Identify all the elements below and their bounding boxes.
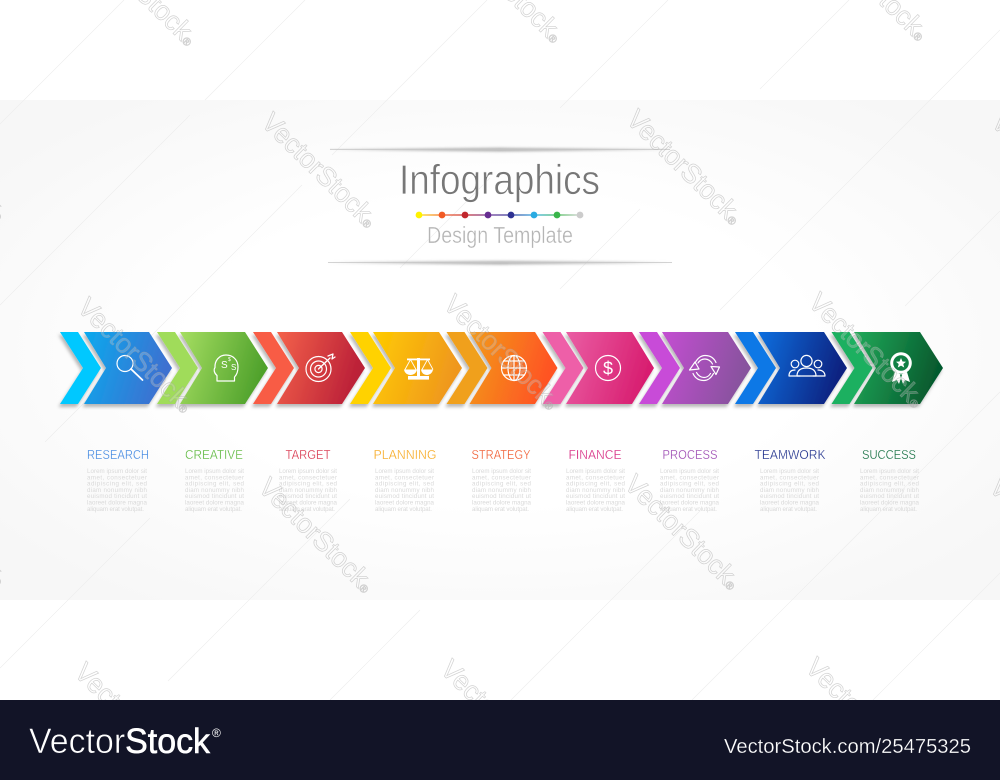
text block: teamwork: laoreet dolore magna (760, 500, 820, 506)
watermarks: VectorStock® (800, 652, 928, 778)
icon: award badge (890, 352, 912, 384)
text block: creative: euismod tincidunt ut (185, 493, 244, 500)
footer image id: VectorStock.com/25475325 (724, 736, 971, 758)
heading: creative: CREATIVE (185, 447, 243, 462)
heading: planning: PLANNING (374, 447, 436, 462)
text block: finance: diam nonummy nibh (566, 487, 626, 494)
text block: success: euismod tincidunt ut (860, 493, 919, 500)
icon: globe (502, 356, 526, 380)
arrow 6: finance (542, 332, 654, 404)
text block: finance: amet, consectetuer (566, 474, 625, 481)
text block: creative (185, 468, 245, 513)
text block: teamwork (760, 468, 820, 513)
text block: research (87, 468, 148, 513)
text block: planning (375, 468, 435, 513)
heading: teamwork: TEAMWORK (754, 447, 826, 462)
icon: magnifier (117, 356, 142, 380)
text block: success: diam nonummy nibh (860, 487, 920, 494)
arrow 1: research (60, 332, 172, 404)
text block: process: Lorem ipsum dolor sit (660, 468, 719, 475)
text block: target: diam nonummy nibh (279, 487, 338, 494)
text block: process: adipiscing elit, sed (660, 481, 720, 488)
icon: balance scale (404, 358, 433, 380)
text block: process: amet, consectetuer (660, 474, 719, 481)
text block: research: amet, consectetuer (87, 474, 147, 481)
text block: target: Lorem ipsum dolor sit (279, 468, 337, 475)
section headings (87, 447, 916, 462)
text block: creative: aliquam erat volutpat. (185, 506, 242, 513)
text block: creative: Lorem ipsum dolor sit (185, 468, 244, 475)
text block: process (660, 468, 720, 513)
icon: head with dollars: S (231, 363, 236, 372)
arrow chain (60, 332, 943, 404)
text block: teamwork: Lorem ipsum dolor sit (760, 468, 819, 475)
text block: planning: euismod tincidunt ut (375, 493, 434, 500)
icon: head with dollars (214, 355, 238, 381)
text block: success: amet, consectetuer (860, 474, 919, 481)
text block: planning: Lorem ipsum dolor sit (375, 468, 434, 475)
text block: research: Lorem ipsum dolor sit (87, 468, 147, 475)
text block: target: aliquam erat volutpat. (279, 506, 335, 513)
text block: strategy: amet, consectetuer (472, 474, 531, 481)
text block: research: laoreet dolore magna (87, 500, 148, 506)
subheading: Design Template: Design Template (427, 222, 573, 248)
text block: success: aliquam erat volutpat. (860, 506, 917, 513)
watermarks: VectorStock® (438, 289, 566, 415)
watermarks: VectorStock® (621, 104, 749, 230)
text block: teamwork: adipiscing elit, sed (760, 481, 820, 488)
icon: cycle arrows (690, 356, 720, 380)
text block: research: aliquam erat volutpat. (87, 506, 144, 513)
text block: strategy: Lorem ipsum dolor sit (472, 468, 531, 475)
heading: strategy: STRATEGY (472, 447, 531, 462)
heading: process: PROCESS (662, 447, 718, 462)
watermarks: VectorStock® (253, 472, 381, 598)
text block: creative: laoreet dolore magna (185, 500, 245, 506)
text block: process: diam nonummy nibh (660, 487, 720, 494)
watermarks: VectorStock® (435, 654, 563, 780)
text block: process: euismod tincidunt ut (660, 493, 719, 500)
arrow 3: target (253, 332, 365, 404)
heading: success: SUCCESS (862, 447, 916, 462)
text block: strategy: diam nonummy nibh (472, 487, 532, 494)
icon: dollar coin (596, 356, 620, 380)
heading: research: RESEARCH (87, 447, 149, 462)
text block: creative: amet, consectetuer (185, 474, 244, 481)
text block: creative: adipiscing elit, sed (185, 481, 245, 488)
arrow 9: success (832, 332, 943, 404)
text block: finance: euismod tincidunt ut (566, 493, 625, 500)
watermarks: VectorStock® (619, 469, 747, 595)
arrow 8: teamwork (735, 332, 847, 404)
watermarks: VectorStock® (69, 657, 197, 780)
heading: Infographics: Infographics (399, 156, 600, 203)
timeline dots (416, 212, 583, 218)
text block: teamwork: aliquam erat volutpat. (760, 506, 817, 513)
text block: target: laoreet dolore magna (279, 500, 338, 506)
text block: target (279, 468, 338, 513)
text block: teamwork: euismod tincidunt ut (760, 493, 819, 500)
text block: teamwork: diam nonummy nibh (760, 487, 820, 494)
text block: finance: Lorem ipsum dolor sit (566, 468, 625, 475)
text block: finance: laoreet dolore magna (566, 500, 626, 506)
text block: finance: aliquam erat volutpat. (566, 506, 623, 513)
text block: finance (566, 468, 626, 513)
text block: strategy: adipiscing elit, sed (472, 481, 532, 488)
text block: planning: amet, consectetuer (375, 474, 434, 481)
text block: research: euismod tincidunt ut (87, 493, 147, 500)
text block: strategy: laoreet dolore magna (472, 500, 532, 506)
bottom rule (328, 261, 672, 265)
registered mark: ® (212, 726, 221, 740)
text block: strategy: euismod tincidunt ut (472, 493, 531, 500)
watermarks: VectorStock® (256, 107, 384, 233)
arrow 2: creative (157, 332, 268, 404)
text block: target: euismod tincidunt ut (279, 493, 337, 500)
watermarks: VectorStock® (803, 287, 931, 413)
text block: target: adipiscing elit, sed (279, 481, 338, 488)
text block: process: laoreet dolore magna (660, 500, 720, 506)
text block: finance: adipiscing elit, sed (566, 481, 626, 488)
icon: people group (789, 355, 825, 376)
arrow 7: process (639, 332, 751, 404)
text block: planning: adipiscing elit, sed (375, 481, 435, 488)
arrow 4: planning (350, 332, 462, 404)
text block: success: laoreet dolore magna (860, 500, 920, 506)
text block: success (860, 468, 920, 513)
text block: research: adipiscing elit, sed (87, 481, 148, 488)
text block: planning: laoreet dolore magna (375, 500, 435, 506)
text block: planning: aliquam erat volutpat. (375, 506, 432, 513)
icon: target (306, 354, 335, 382)
text block: target: amet, consectetuer (279, 474, 337, 481)
background band (0, 100, 1000, 600)
watermarks: VectorStock® (72, 292, 200, 418)
icon: dollar coin: $ (603, 358, 613, 378)
text block: research: diam nonummy nibh (87, 487, 148, 494)
arrow 5: strategy (446, 332, 558, 404)
footer logo: VectorStock (29, 722, 210, 761)
heading: finance: FINANCE (568, 447, 622, 462)
text block: planning: diam nonummy nibh (375, 487, 435, 494)
text block: creative: diam nonummy nibh (185, 487, 245, 494)
heading: target: TARGET (286, 447, 331, 462)
text block: success: adipiscing elit, sed (860, 481, 920, 488)
text block: process: aliquam erat volutpat. (660, 506, 717, 513)
text block: success: Lorem ipsum dolor sit (860, 468, 919, 475)
icon: head with dollars: S (221, 360, 228, 371)
title block (328, 148, 672, 265)
text block: strategy: aliquam erat volutpat. (472, 506, 529, 513)
icon: head with dollars: $ (228, 357, 231, 363)
text block: strategy (472, 468, 532, 513)
top rule (330, 148, 670, 152)
text block: teamwork: amet, consectetuer (760, 474, 819, 481)
footer bar (0, 700, 1000, 780)
